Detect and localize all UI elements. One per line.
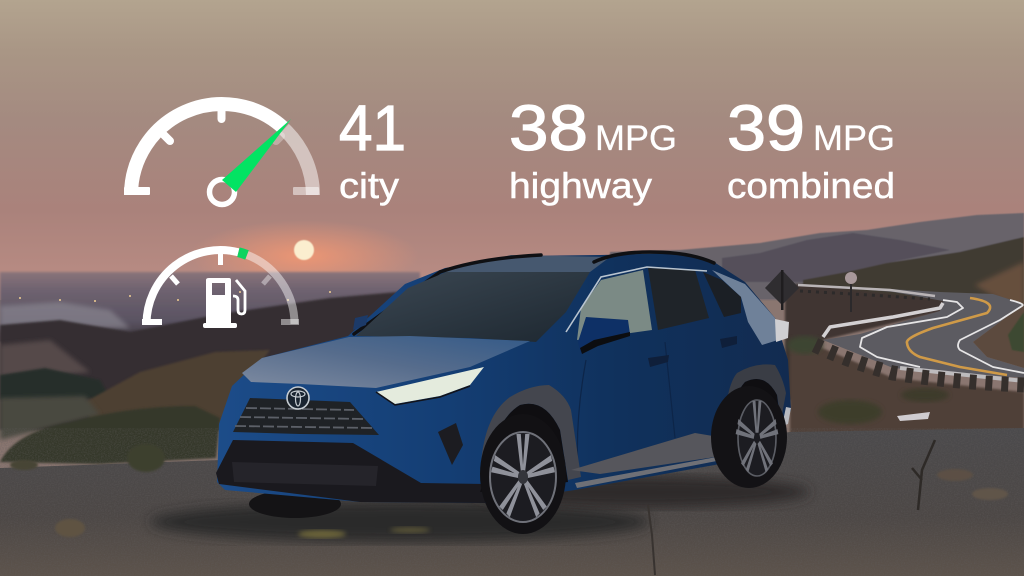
hub ring: [210, 180, 234, 204]
speedometer gauge: [124, 104, 319, 204]
label highway: highway: [509, 165, 652, 206]
background: sunset sky: [0, 0, 1024, 300]
fog light: [438, 423, 463, 465]
car body: [217, 253, 791, 503]
door seams and handles: [577, 336, 737, 470]
guardrails: [798, 285, 1024, 385]
left mirror: [353, 315, 368, 330]
gauge ticks: [163, 108, 281, 141]
green needle: [222, 119, 291, 192]
rear pillar reflection: [712, 270, 778, 345]
roof rails: [354, 252, 714, 334]
rear wheel: [711, 386, 787, 488]
gravel ground: [0, 412, 1024, 576]
window trim: [566, 267, 707, 332]
fuel arc: unfilled portion: [247, 255, 294, 324]
number 38: 38: [509, 92, 588, 164]
bumper intake: [232, 462, 378, 486]
roof: [440, 255, 610, 272]
side mirror: [578, 317, 630, 354]
rear side window: [648, 268, 709, 330]
rear wheel well: [720, 379, 781, 462]
sun: [294, 240, 314, 260]
gauge arc: filled portion: [131, 104, 283, 195]
town lights: [19, 291, 331, 302]
number 39: 39: [727, 92, 805, 164]
left foreground shrubs: [0, 406, 220, 464]
rear wheel arch: [725, 364, 786, 425]
sill trim: [571, 433, 725, 474]
fuel gauge ticks: [171, 254, 270, 284]
label combined: combined: [727, 165, 895, 206]
rear light: [775, 319, 789, 342]
front side window: [577, 270, 652, 340]
icon: fuel pump: [203, 278, 245, 328]
grille slats: [235, 408, 373, 428]
fuel arc: filled portion: [146, 250, 238, 324]
front wheel well: [480, 404, 568, 492]
fuel level marker: [238, 252, 247, 255]
left town and hills: [0, 272, 420, 440]
label city: city: [339, 165, 399, 206]
winding road: [798, 284, 1024, 378]
right slopes around the road: [785, 284, 1024, 435]
side step: [575, 456, 722, 488]
headlight: [376, 367, 484, 405]
gauge feet: [124, 187, 319, 195]
gauge arc: unfilled portion: [284, 129, 313, 195]
road sign: [765, 270, 857, 312]
stat: combined: [727, 92, 895, 206]
stat: city: [339, 92, 406, 206]
far front tyre: [249, 490, 341, 518]
stat: highway: [509, 92, 677, 206]
unit MPG: MPG: [813, 119, 895, 158]
grille: [233, 398, 379, 435]
fuel gauge: [142, 250, 299, 328]
hood: [242, 336, 530, 388]
SUV: [216, 252, 791, 534]
rear bumper chrome: [782, 407, 791, 426]
front wheel: [480, 414, 566, 534]
unit MPG: MPG: [595, 119, 677, 158]
rear quarter window: [703, 272, 741, 317]
distant mountains: [610, 213, 1024, 315]
windshield: [356, 272, 590, 342]
lower bumper: [216, 440, 485, 503]
badge: [287, 387, 309, 409]
front wheel arch: [481, 385, 581, 480]
number 41: 41: [339, 92, 406, 164]
fuel gauge feet: [142, 319, 299, 325]
